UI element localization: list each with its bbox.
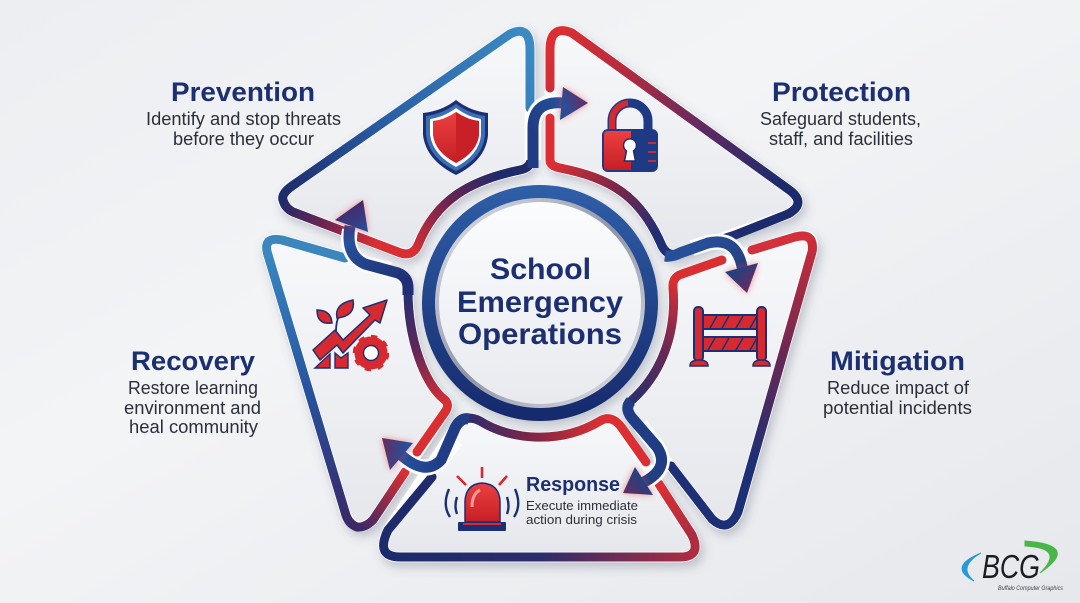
panel: mitigation <box>629 236 813 525</box>
text: response description: action during crisis <box>526 512 638 527</box>
logo: BCG <box>962 541 1063 592</box>
title: school emergency operations: Operations <box>458 318 622 351</box>
logo green arc <box>1025 541 1057 573</box>
arrow: prevention to protection <box>533 87 588 168</box>
label: protection <box>760 77 921 149</box>
icon: alarm siren <box>446 467 518 531</box>
label: mitigation: Mitigation <box>830 346 965 376</box>
outline: recovery <box>267 239 448 527</box>
label: prevention: before they occur <box>173 129 314 149</box>
panel shape: recovery <box>267 239 448 526</box>
logo blue arc <box>962 553 981 581</box>
label: prevention <box>146 77 341 149</box>
panel: response <box>384 418 695 557</box>
center hub <box>422 185 658 421</box>
hub outer ring <box>422 185 658 421</box>
label: recovery <box>124 346 261 437</box>
icon: padlock <box>602 103 658 172</box>
icon: recovery growth chart <box>313 300 387 369</box>
logo letters: BCG <box>982 548 1040 585</box>
text: response description: Execute immediate <box>526 498 638 513</box>
label: recovery: environment and <box>124 398 261 418</box>
panel shape: prevention <box>283 31 530 254</box>
logo tagline: Buffalo Computer Graphics <box>998 586 1063 592</box>
hub silver ring <box>435 198 645 408</box>
label: recovery: heal community <box>129 417 258 437</box>
hub disc <box>439 202 641 404</box>
label: mitigation <box>823 346 972 418</box>
icon: barrier <box>690 307 770 366</box>
label: protection: staff, and facilities <box>769 129 913 149</box>
label: recovery: Restore learning <box>128 378 258 398</box>
panel: recovery <box>267 239 448 527</box>
outline: prevention <box>283 31 531 254</box>
label: recovery: Recovery <box>131 346 255 376</box>
label: mitigation: potential incidents <box>823 398 972 418</box>
arrow: protection to mitigation <box>665 242 758 293</box>
arrow: mitigation to response <box>623 401 662 495</box>
outline: mitigation <box>632 236 812 525</box>
panel shape: protection <box>550 31 798 254</box>
arrow: recovery to prevention <box>335 200 408 295</box>
panel shape: response <box>384 419 695 557</box>
arrow: response to recovery <box>382 419 469 470</box>
title: school emergency operations: School <box>490 253 591 286</box>
outline: response <box>384 418 695 557</box>
panel: prevention <box>283 31 531 254</box>
label: prevention: Identify and stop threats <box>146 109 341 129</box>
panel: protection <box>550 31 798 254</box>
panel shape: mitigation <box>629 236 813 525</box>
label: mitigation: Reduce impact of <box>827 378 970 398</box>
label: protection: Safeguard students, <box>760 109 921 129</box>
outline: protection <box>550 31 798 254</box>
label: prevention: Prevention <box>171 77 315 107</box>
icon: shield <box>423 100 488 175</box>
heading: response: Response <box>526 474 620 496</box>
title: school emergency operations: Emergency <box>457 286 623 319</box>
label: protection: Protection <box>772 77 911 107</box>
